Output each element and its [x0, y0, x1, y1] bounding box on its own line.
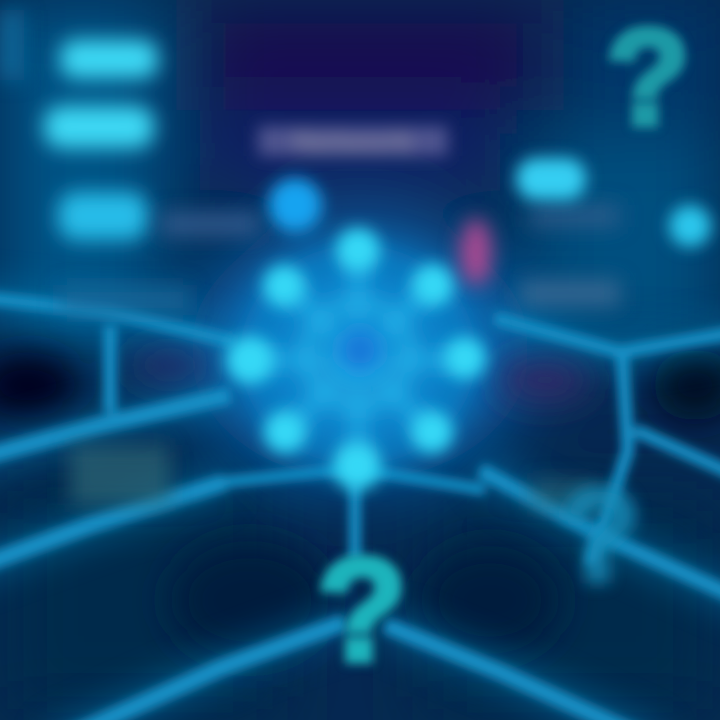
faint labels — [0, 10, 620, 510]
question mark: bottom center: ? — [317, 528, 407, 691]
hub nodes — [226, 228, 486, 490]
title — [258, 126, 448, 159]
central hub network — [226, 228, 486, 490]
title: Network — [294, 126, 412, 159]
question mark: top right: ? — [606, 1, 690, 153]
hub links — [270, 268, 448, 448]
hub core — [338, 328, 382, 372]
right cyan pill — [516, 158, 586, 200]
network connector lines — [0, 295, 720, 720]
connector line glow — [0, 295, 720, 720]
dark side patches — [0, 349, 720, 660]
left menu pills — [44, 40, 158, 240]
pink accent — [460, 218, 492, 286]
right cyan node — [669, 205, 711, 247]
top blue node — [268, 178, 322, 232]
background glows — [0, 0, 720, 526]
question mark: lower right: ? — [560, 462, 640, 608]
hub glow — [240, 245, 476, 465]
